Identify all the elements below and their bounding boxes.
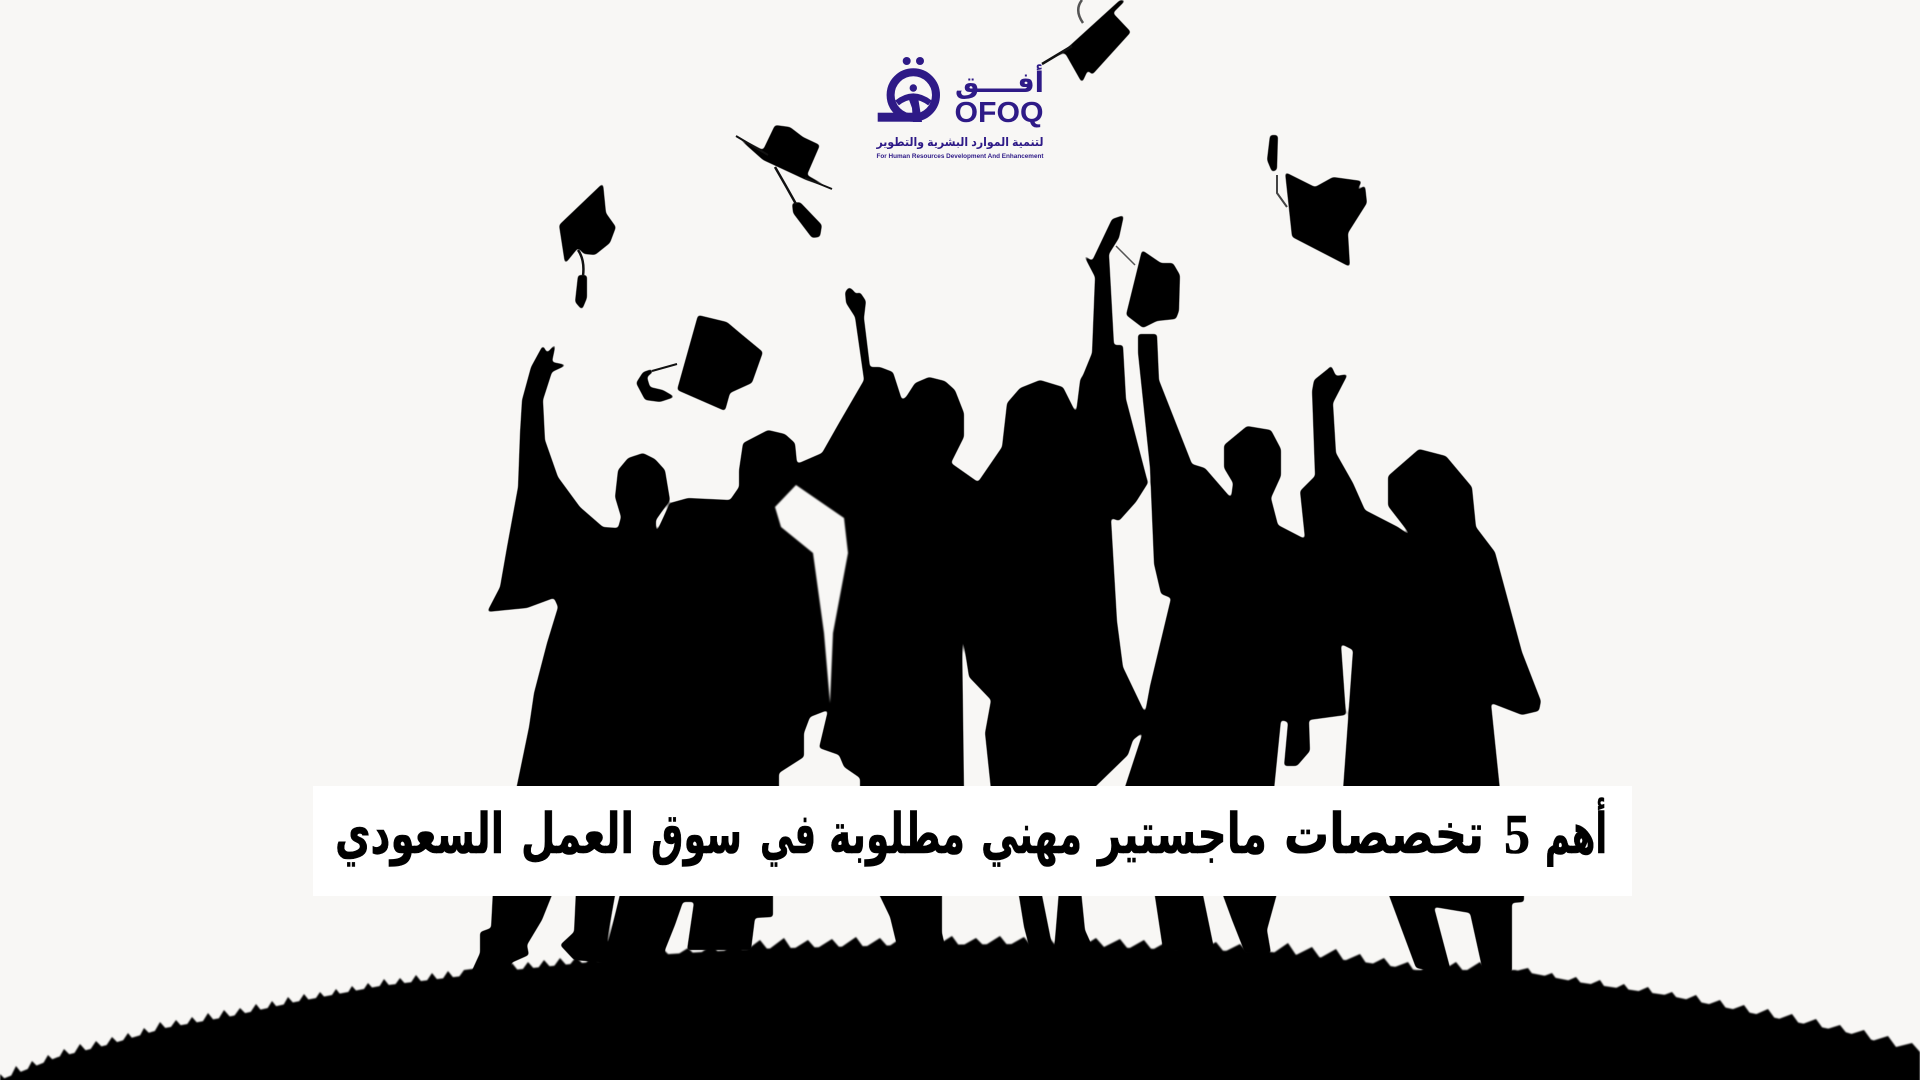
thrown cap: lower (636, 315, 763, 411)
logo latin name: OFOQ (954, 97, 1044, 129)
logo icon (878, 57, 936, 122)
logo english tagline: For Human Resources Development And Enhancement (876, 153, 1044, 160)
title text: العمل (521, 804, 634, 866)
title text (335, 797, 1607, 867)
title text: مهني (981, 804, 1082, 867)
logo arabic name: أفــــق (955, 64, 1044, 99)
title text: في (760, 804, 816, 867)
title text: ماجستير (1096, 804, 1267, 867)
title text: السعودي (335, 804, 504, 867)
logo arabic tagline: لتنمية الموارد البشرية والتطوير (876, 135, 1044, 150)
grassy hill (0, 936, 1920, 1080)
thrown cap: hat (736, 125, 832, 238)
graduates group (487, 215, 1541, 790)
title text: 5 (1504, 804, 1530, 866)
held cap (1126, 250, 1180, 328)
title text: سوق (651, 804, 742, 867)
title text: تخصصات (1284, 804, 1484, 866)
graduates legs (469, 890, 1524, 977)
logo: OFOQ (876, 57, 1044, 160)
title banner (313, 786, 1632, 896)
silhouettes with rounded edges (469, 0, 1541, 977)
cap strings and thin brims (578, 0, 1287, 371)
thrown cap: top centre (1042, 0, 1131, 83)
thrown cap: left (559, 183, 616, 310)
thrown cap: right (1267, 135, 1367, 267)
title text: مطلوبة (829, 804, 965, 867)
gap between graduates (775, 485, 848, 703)
title text: أهم (1545, 797, 1607, 867)
